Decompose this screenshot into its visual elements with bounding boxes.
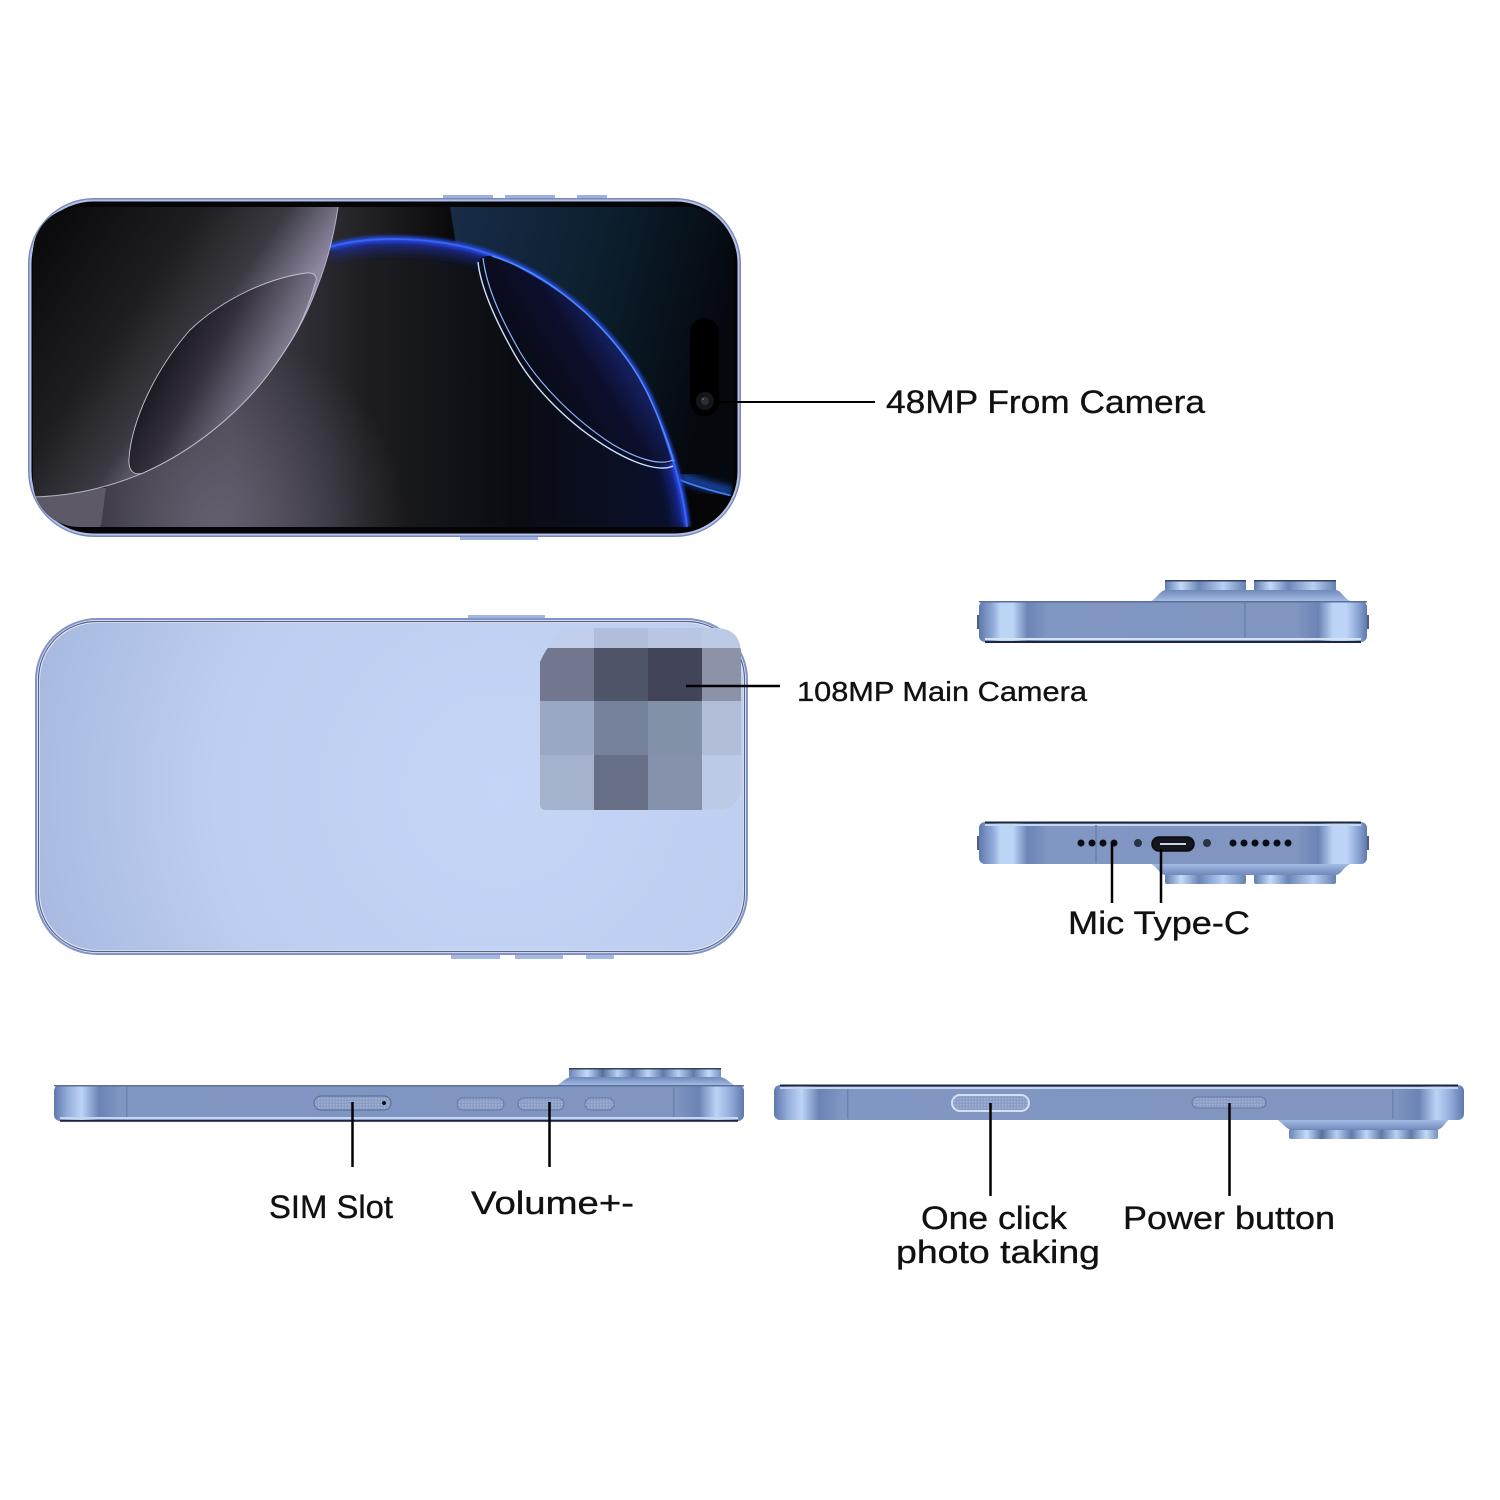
right side lens bbox=[1289, 1129, 1438, 1139]
photo button bbox=[952, 1095, 1029, 1111]
leader line bbox=[548, 1102, 551, 1167]
top edge camera base bbox=[1150, 590, 1352, 602]
phone: front view with screen bbox=[20, 195, 741, 540]
callout: SIM slot bbox=[269, 1102, 393, 1225]
blue right area bbox=[450, 207, 733, 496]
callout: mic and Type-C bbox=[1068, 844, 1250, 941]
dome inner glow bbox=[330, 239, 687, 527]
bottom edge side buttons bbox=[977, 836, 980, 850]
SIM slot bbox=[314, 1096, 391, 1110]
top edge body bbox=[979, 601, 1367, 642]
microphone holes bbox=[1078, 840, 1118, 846]
leader line bbox=[686, 685, 780, 687]
phone: left side view bbox=[54, 1068, 744, 1122]
front side buttons bbox=[443, 195, 607, 540]
label: 108MP Main Camera bbox=[797, 676, 1087, 707]
label: SIM Slot bbox=[269, 1189, 393, 1225]
front frame bbox=[28, 198, 741, 537]
blue right ellipse bbox=[479, 256, 672, 464]
wallpaper bbox=[20, 207, 733, 530]
label first line: One click bbox=[921, 1200, 1068, 1236]
camera notch bbox=[690, 318, 719, 416]
bright blue ellipse edge bbox=[492, 256, 674, 462]
central dome bbox=[101, 239, 687, 527]
label: Mic Type-C bbox=[1068, 905, 1250, 941]
left side camera base bbox=[556, 1077, 736, 1086]
phone: bottom edge view with ports bbox=[977, 822, 1369, 884]
bottom edge lenses bbox=[1165, 874, 1246, 884]
dome blue edge bbox=[330, 239, 687, 527]
left side body bbox=[54, 1085, 744, 1121]
phone: top edge view bbox=[977, 580, 1369, 643]
leader line bbox=[719, 401, 875, 403]
top edge side buttons bbox=[977, 615, 980, 629]
left side lens bbox=[569, 1068, 721, 1078]
back frame bbox=[35, 618, 748, 955]
leader lines bbox=[1112, 844, 1161, 903]
grey left shape bbox=[20, 207, 338, 497]
label: 48MP From Camera bbox=[886, 384, 1205, 420]
back glass bbox=[40, 623, 743, 950]
pixelated main camera bbox=[540, 628, 741, 810]
label: Volume+- bbox=[471, 1185, 634, 1221]
right side body bbox=[774, 1085, 1464, 1120]
bottom edge camera base bbox=[1150, 863, 1352, 875]
lower left lilac bbox=[36, 488, 106, 527]
phone: back view bbox=[35, 615, 748, 959]
callout: one click photo taking bbox=[896, 1103, 1100, 1270]
back buttons bbox=[451, 615, 614, 959]
phone: right side view bbox=[774, 1084, 1464, 1139]
volume buttons bbox=[457, 1098, 614, 1110]
front camera lens bbox=[696, 392, 714, 410]
leader line bbox=[989, 1103, 992, 1196]
grey inner ellipse bbox=[129, 273, 316, 474]
label: Power button bbox=[1123, 1200, 1335, 1236]
top centre gap bbox=[331, 207, 439, 246]
bottom edge body bbox=[979, 822, 1367, 864]
label second line: photo taking bbox=[896, 1234, 1100, 1270]
right side camera base bbox=[1276, 1119, 1450, 1130]
bottom right glow edge bbox=[680, 476, 733, 492]
USB-C port bbox=[1152, 837, 1194, 851]
leader line bbox=[1228, 1103, 1231, 1196]
top edge lenses bbox=[1165, 580, 1246, 591]
power button bbox=[1192, 1097, 1266, 1108]
speaker holes bbox=[1230, 840, 1292, 846]
leader line bbox=[351, 1102, 354, 1167]
screws bbox=[1134, 839, 1211, 847]
